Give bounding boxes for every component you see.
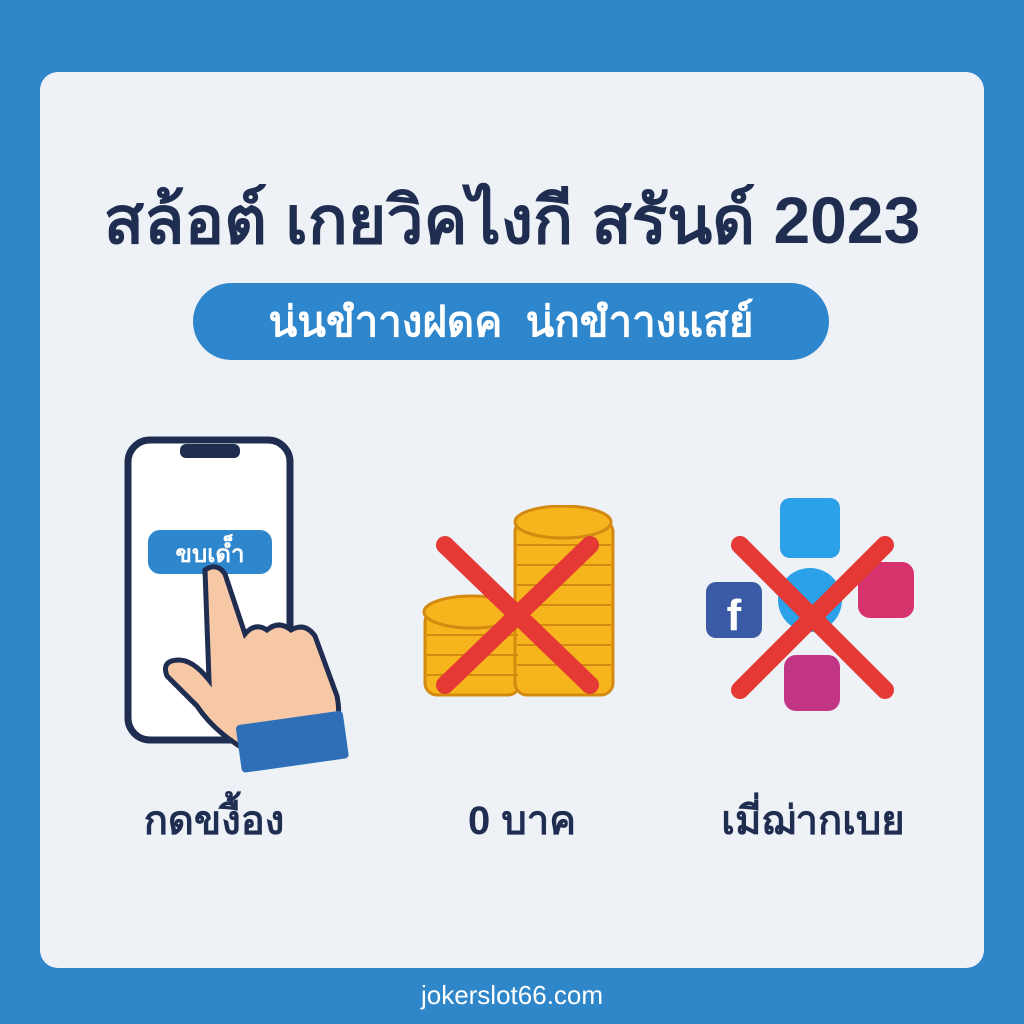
icon: social crossed [706,498,914,711]
title: สล้อต์ เกยวิคไงกี สรันด์ 2023 [104,183,920,257]
subtitle pill [193,283,829,360]
label: click: กดขงื้อง [144,799,284,843]
icon: phone with hand: ขบเด็ำ [176,533,244,568]
label: 0 baht: 0 บาค [468,799,576,843]
icon: social crossed: f [727,591,742,640]
icon: phone with hand [124,436,349,772]
icon: coins crossed [422,505,614,696]
footer: jokerslot66.com [421,980,603,1010]
subtitle pill: น่นขำางฝดค น่กขำางแสย์ [269,298,753,345]
label: no sharing: เมี่ฌ่ากเบย [721,799,905,843]
